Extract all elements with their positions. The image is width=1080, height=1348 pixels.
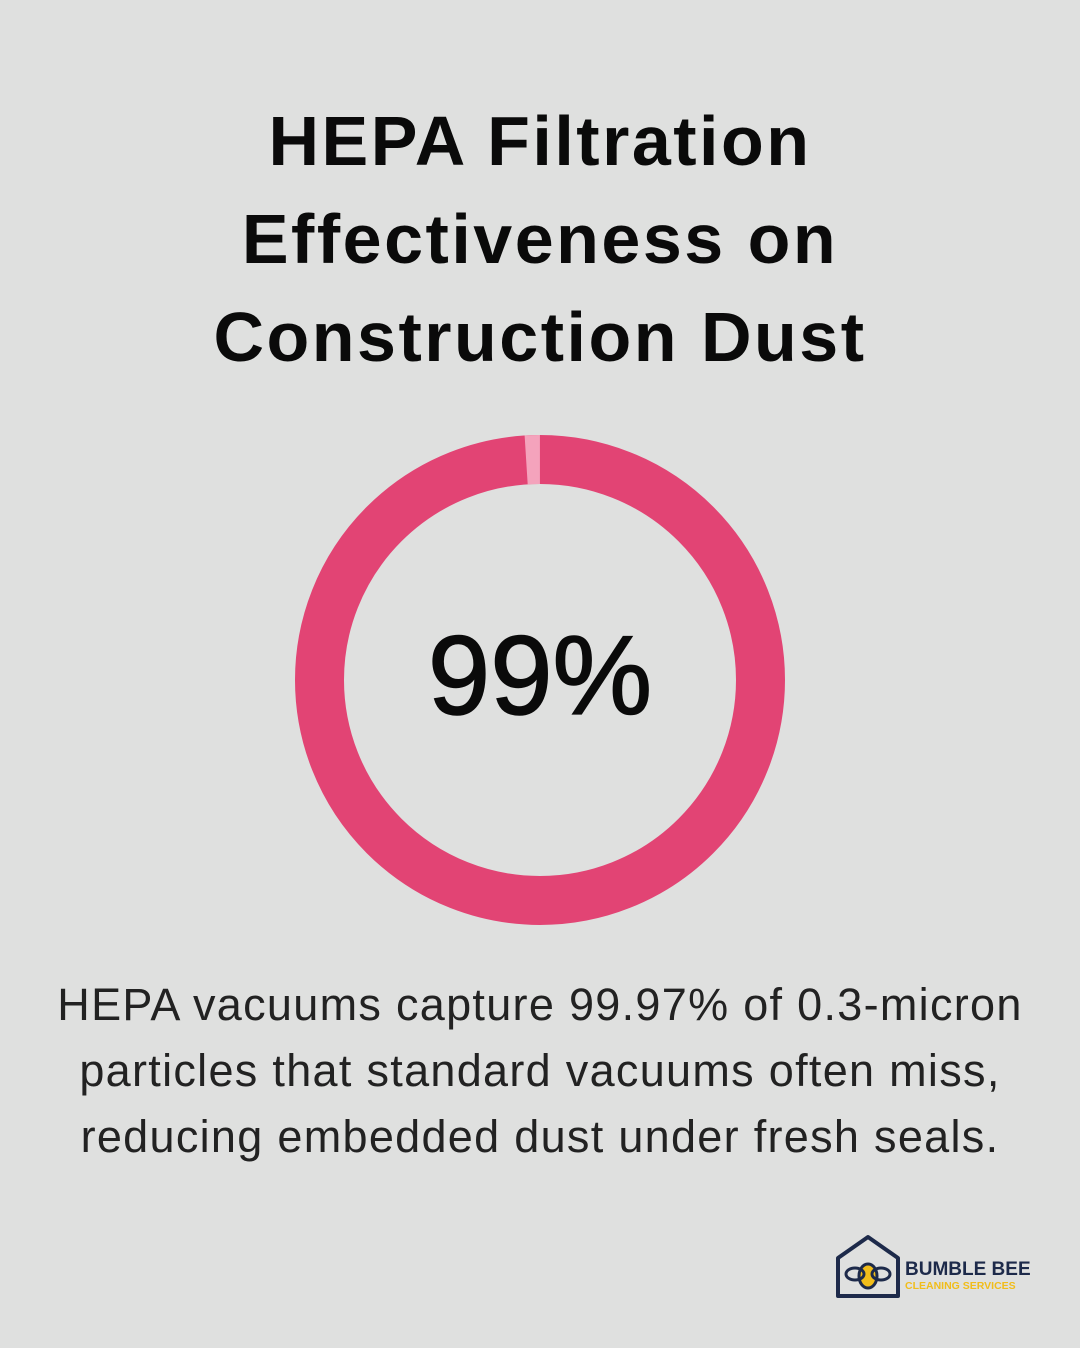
- logo: BUMBLE BEE: [905, 1259, 1031, 1280]
- title: Effectiveness on: [242, 200, 838, 278]
- description: HEPA vacuums capture 99.97% of 0.3-micron: [57, 979, 1023, 1030]
- title: HEPA Filtration: [268, 102, 812, 180]
- title: Construction Dust: [213, 298, 867, 376]
- description: [57, 979, 1023, 1162]
- title: [213, 102, 867, 376]
- logo: CLEANING SERVICES: [905, 1280, 1016, 1292]
- description: reducing embedded dust under fresh seals.: [81, 1111, 999, 1162]
- logo: [836, 1235, 1031, 1298]
- donut chart: 99%: [428, 613, 652, 738]
- description: particles that standard vacuums often miss,: [79, 1045, 1001, 1096]
